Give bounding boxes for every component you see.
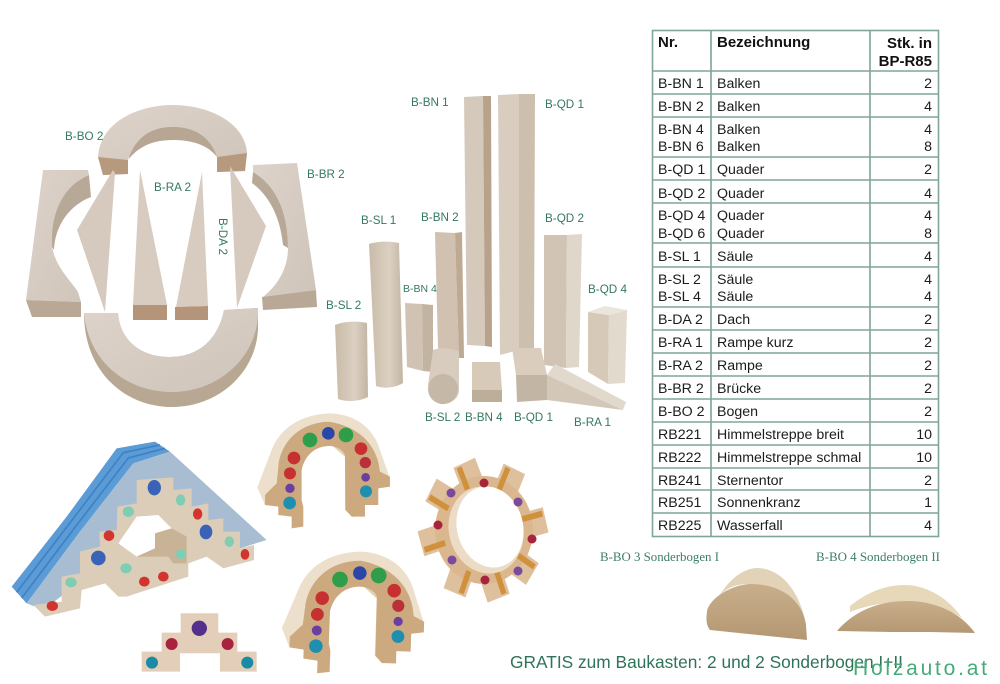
table rows: B-DA 2 [658,312,703,328]
block: right bridge [252,163,317,310]
opening in wall [118,515,172,557]
table rows: B-RA 1 [658,335,703,351]
table rows: 4 [924,208,932,224]
photo: bridge, arch, roof and ramp blocks [26,105,317,407]
photo: arch with star and moon gems, lower [280,549,427,677]
table rows: Balken [717,139,760,155]
table rows: 4 [924,272,932,288]
caption: B-BO 3: B-BO 3 Sonderbogen I [600,550,719,564]
table rows: Himmelstreppe schmal [717,450,861,466]
inner side of arch [362,588,387,664]
caption: B-BO 4: B-BO 4 Sonderbogen II [816,550,940,564]
label: B-QD 2 [545,212,584,225]
shaded step inside opening [137,528,187,563]
block: B-BN 1 beam [464,96,492,347]
block: B-RA 1 ramp [547,364,626,410]
block: B-SL 2 lying [428,348,459,404]
table rows: Balken [717,76,760,92]
block: top arch B-BO 2 [98,105,247,175]
table rows: B-BN 6 [658,139,704,155]
label: B-BN 4 [403,283,437,295]
table rows: Rampe kurz [717,335,793,351]
block: B-QD 4 square column [588,306,627,384]
wooden stair wall [33,477,254,617]
curved top [850,585,962,618]
table rows: B-SL 1 [658,249,701,265]
table rows: 4 [924,122,932,138]
label: B-QD 4 [588,283,627,296]
cream rim [257,413,390,505]
photo: small stepped block [142,613,257,672]
inner wall [439,478,533,582]
table rows: B-SL 2 [658,272,701,288]
front face [289,558,426,677]
table rows: B-QD 4 [658,208,705,224]
label: B-BN 4 [465,411,503,424]
table rows: Quader [717,208,765,224]
photo: Sonderbogen I half-moon [706,568,807,640]
cream rim [281,549,427,652]
table rows: B-RA 2 [658,358,703,374]
table rows: 1 [924,495,932,511]
ring hole [448,479,532,575]
table rows: Balken [717,122,760,138]
block: ramp left [133,170,167,320]
table rows: Himmelstreppe breit [717,427,844,443]
blue roof strips [12,442,170,603]
curved top [720,568,806,625]
table rows: 8 [924,226,932,242]
table rows: 2 [924,76,932,92]
table rows: B-QD 2 [658,186,705,202]
photo: stair bridge with blue roof and gems [12,442,267,617]
block: B-QD 2 square column [544,234,582,368]
table rows: RB225 [658,518,701,534]
table rows: RB221 [658,427,701,443]
table rows: RB251 [658,495,701,511]
photo: sun ring with gems [417,458,548,603]
table grid [652,30,939,536]
table rows: 2 [924,358,932,374]
table rows: 2 [924,335,932,351]
table rows: Quader [717,162,765,178]
table rows: Brücke [717,381,761,397]
table rows: Sternentor [717,473,784,489]
photo: columns and beams [335,94,627,410]
table rows: Säule [717,272,753,288]
label: B-SL 1 [361,214,396,227]
label: B-BR 2 [307,168,345,181]
label: B-BN 1 [411,96,449,109]
stepped wood face [142,613,257,672]
table header: Bezeichnung [717,34,810,51]
label: B-SL 2 [425,411,460,424]
front face [706,584,807,640]
table rows: B-BN 4 [658,122,704,138]
table rows: Balken [717,99,760,115]
table rows: B-QD 6 [658,226,705,242]
block: B-BN 2 beam [435,232,464,358]
free-gift note: GRATIS zum Baukasten: 2 und 2 Sonderbogen I+II [510,652,903,672]
table rows: Bogen [717,404,758,420]
grey-blue roof face [27,452,267,610]
photo: Sonderbogen II half-moon [837,585,975,633]
gems [283,427,372,509]
label: B-BO 2 [65,130,103,143]
table rows: B-QD 1 [658,162,705,178]
label: B-RA 2 [154,181,191,194]
label: B-BN 2 [421,211,459,224]
table rows: Quader [717,186,765,202]
block: B-BN 4 lying [472,362,502,402]
label: B-QD 1 [545,98,584,111]
table rows: 2 [924,312,932,328]
block: B-SL 2 upright [335,322,368,401]
table rows: 4 [924,99,932,115]
table rows: RB222 [658,450,701,466]
ring face [435,476,533,584]
table rows: Sonnenkranz [717,495,801,511]
inner side of arch [333,447,354,517]
table rows: Wasserfall [717,518,783,534]
gems [47,480,249,611]
gems [309,565,407,656]
table rows: B-BR 2 [658,381,704,397]
block: B-SL 1 column [369,242,403,388]
block: B-QD 1 square column [498,94,535,355]
table header: Stk. in [887,35,932,52]
table rows [658,76,932,534]
parts table [652,30,939,536]
table rows: 4 [924,249,932,265]
block: left bridge [26,170,91,317]
table rows: Rampe [717,358,763,374]
table header: Nr. [658,34,678,51]
table header: BP-R85 [879,53,932,70]
table rows: 2 [924,473,932,489]
block: left roof wedge [77,170,115,312]
front face [265,422,390,528]
table rows: 4 [924,289,932,305]
table rows: B-BO 2 [658,404,705,420]
table rows: 10 [916,427,932,443]
table header [658,34,932,70]
block: right roof wedge [230,166,266,308]
table rows: RB241 [658,473,701,489]
table rows: Säule [717,249,753,265]
table rows: Dach [717,312,750,328]
table rows: 2 [924,162,932,178]
table rows: B-BN 1 [658,76,704,92]
gold strips [424,466,543,595]
block: ramp right [175,172,208,320]
table rows: 2 [924,381,932,397]
table rows: Säule [717,289,753,305]
block: bottom arch [84,308,258,407]
table rows: Quader [717,226,765,242]
table rows: 4 [924,186,932,202]
watermark: Holzauto.at [853,657,987,680]
block: B-BN 4 upright [405,303,433,372]
front face [837,601,975,633]
table rows: 8 [924,139,932,155]
labels: block names [65,96,627,429]
label: B-DA 2 [216,218,229,255]
label: B-RA 1 [574,416,611,429]
label: B-SL 2 [326,299,361,312]
table rows: B-BN 2 [658,99,704,115]
gems [146,621,253,669]
table rows: 2 [924,404,932,420]
gems [434,478,536,584]
block: B-QD 1 lying [512,348,547,402]
table rows: B-SL 4 [658,289,701,305]
ring teeth [417,458,548,603]
table rows: 4 [924,518,932,534]
photo: arch with star and moon gems, upper [257,413,390,528]
label: B-QD 1 [514,411,553,424]
table rows: 10 [916,450,932,466]
